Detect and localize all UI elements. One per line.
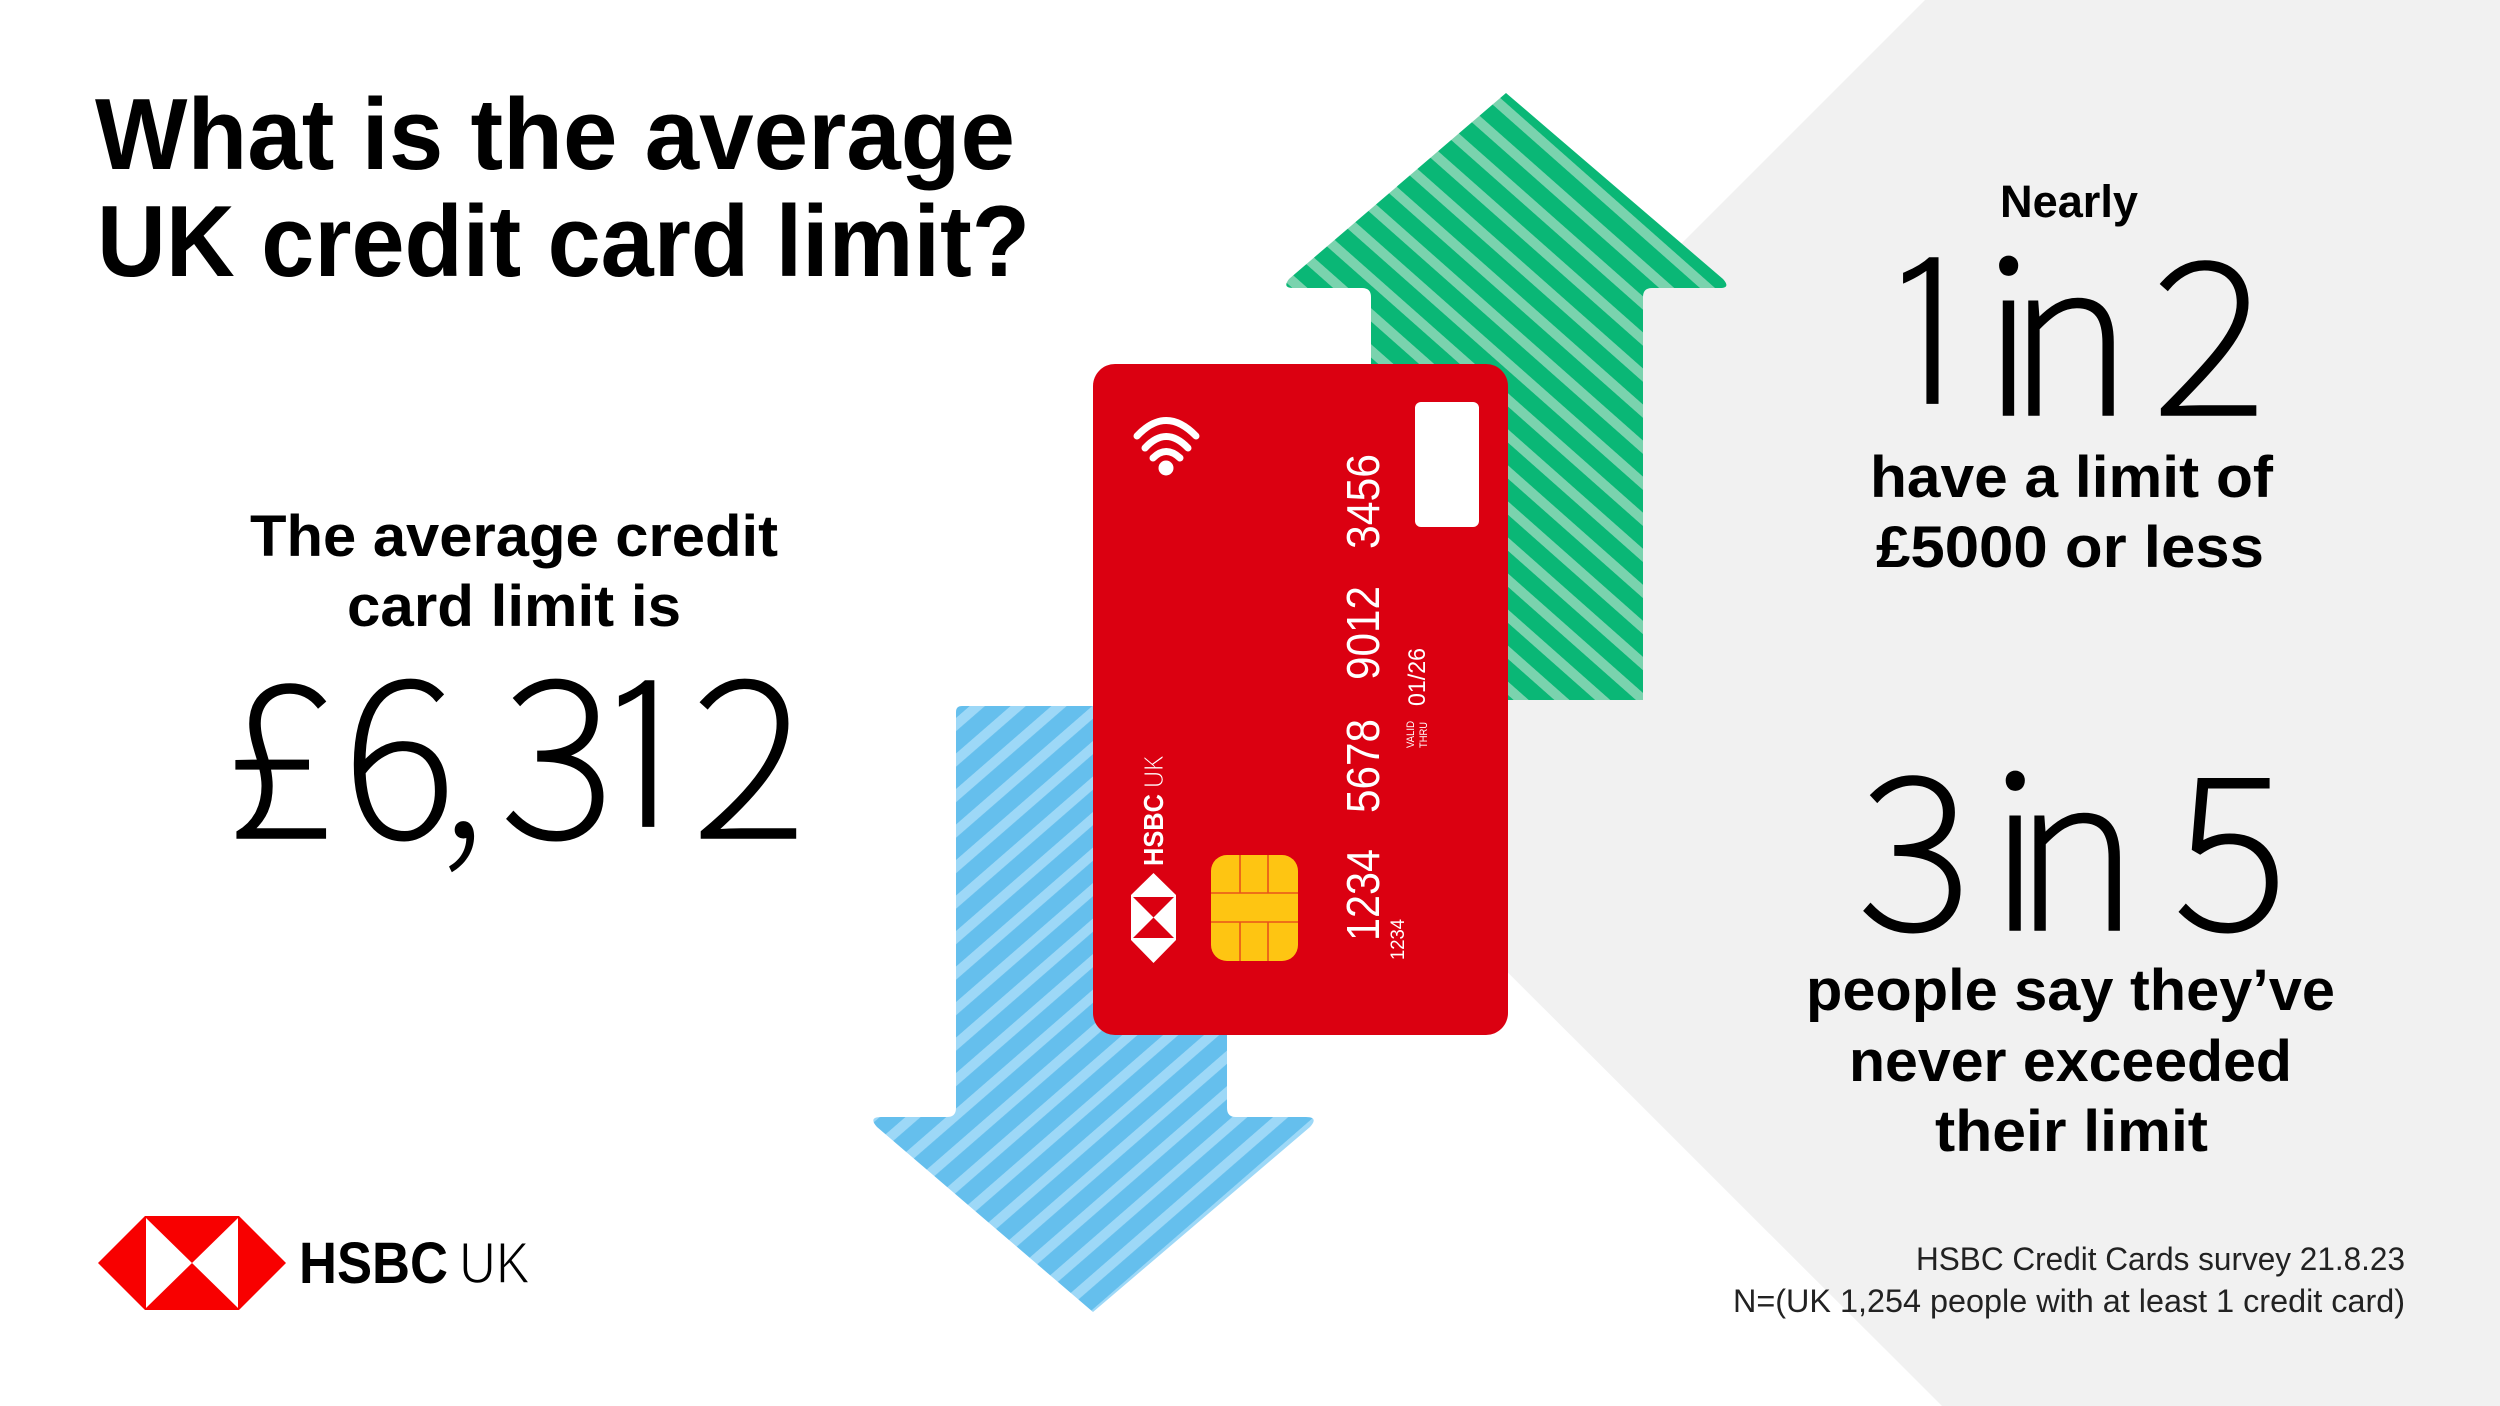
description [1806,958,2335,1164]
stat: 3 in 5 [1806,683,2335,1164]
valid thru label: VALID [1405,721,1417,748]
icon: contactless [1137,420,1196,476]
wordmark: HSBC [299,1231,448,1296]
card number: 1234 [1337,849,1389,941]
card number: 3456 [1337,454,1389,549]
blue down arrow [873,706,1314,1312]
HSBC UK logo [98,1216,530,1310]
green up arrow [1286,93,1726,700]
credit card [1093,364,1508,1035]
average limit label: The average credit [250,504,778,569]
average limit label [250,504,778,639]
grey background panel [1230,0,2500,1406]
valid thru label: THRU [1418,722,1430,748]
card number: 9012 [1337,586,1389,680]
figure 1 in 2: in2 [1982,168,2265,475]
title [95,79,1030,298]
stat: 1 in 2 [1870,168,2274,580]
card brand name: UK [1138,755,1169,788]
description: their limit [1935,1099,2208,1164]
figure 1 in 2: 1 [1874,227,1985,445]
description: £5000 or less [1876,515,2264,580]
average limit figure: £6 [224,591,455,898]
icon: card hexagon logo [1131,873,1176,963]
card body [1093,364,1508,1035]
card brand name: HSBC [1138,794,1169,866]
wordmark: UK [459,1231,530,1296]
source note [1733,1241,2405,1319]
title: UK credit card limit? [97,186,1030,298]
nearly label: Nearly [2000,176,2138,227]
valid thru label [1405,721,1430,748]
signature panel [1415,402,1479,527]
average limit figure: , [438,591,488,898]
average limit text block [224,504,805,898]
figure 3 in 5: 3in5 [1858,683,2287,990]
description: never exceeded [1849,1029,2292,1094]
title: What is the average [95,79,1015,191]
average limit figure: 3 [501,591,614,898]
average limit label: card limit is [347,574,681,639]
icon: hexagon [98,1216,286,1310]
expiry date: 01/26 [1404,648,1431,706]
small card digits: 1234 [1388,919,1409,960]
average limit figure: 2 [693,591,805,898]
description [1870,445,2274,580]
card number: 5678 [1337,719,1389,813]
average limit figure: 1 [590,650,701,868]
card number [1337,454,1389,941]
source note: N=(UK 1,254 people with at least 1 credit card) [1733,1283,2405,1319]
description: have a limit of [1870,445,2274,510]
source note: HSBC Credit Cards survey 21.8.23 [1916,1241,2405,1277]
icon: chip [1211,855,1298,961]
description: people say they’ve [1806,958,2335,1023]
